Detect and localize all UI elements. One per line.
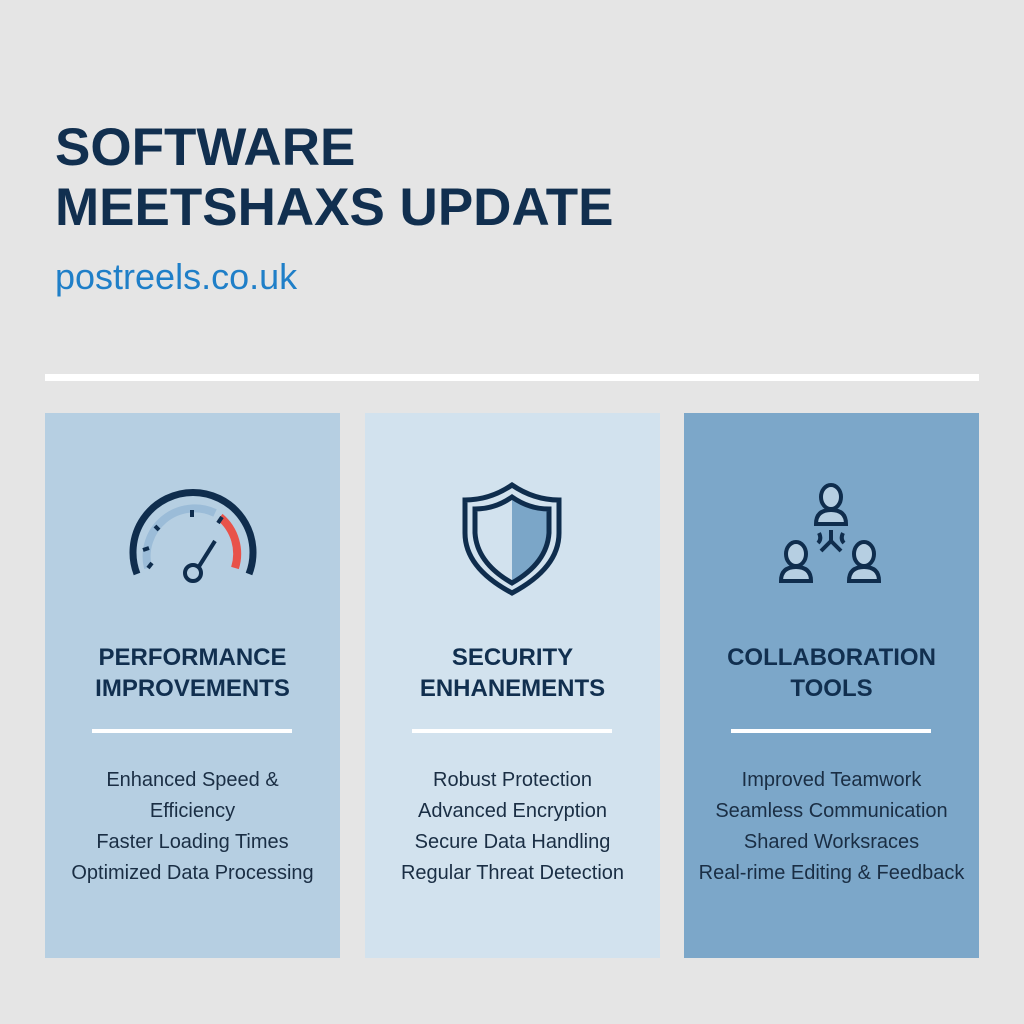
title: [55, 118, 614, 237]
list: Seamless Communication: [715, 800, 948, 822]
heading: IMPROVEMENTS: [95, 675, 290, 702]
list: Enhanced Speed &: [106, 769, 279, 791]
title: SOFTWARE: [55, 118, 355, 177]
heading: COLLABORATION: [727, 644, 936, 671]
panel: performance: [45, 413, 340, 958]
list: Robust Protection: [433, 769, 592, 791]
panel: collaboration: [684, 413, 979, 958]
heading: [95, 644, 290, 702]
list: Improved Teamwork: [742, 769, 921, 791]
list: [71, 769, 314, 884]
list: [401, 769, 624, 884]
icon: people network: [779, 483, 881, 583]
list: Efficiency: [150, 800, 235, 822]
list: Real-rime Editing & Feedback: [699, 862, 964, 884]
list: Shared Worksraces: [744, 831, 919, 853]
list: Advanced Encryption: [418, 800, 607, 822]
list: Regular Threat Detection: [401, 862, 624, 884]
subtitle url: postreels.co.uk: [55, 256, 297, 297]
heading: PERFORMANCE: [98, 644, 286, 671]
list: Faster Loading Times: [96, 831, 289, 853]
icon: shield: [462, 482, 562, 596]
list: Optimized Data Processing: [71, 862, 314, 884]
divider line: [45, 374, 979, 381]
title: MEETSHAXS UPDATE: [55, 178, 614, 237]
heading: TOOLS: [790, 675, 873, 702]
heading: SECURITY: [452, 644, 573, 671]
list: Secure Data Handling: [415, 831, 610, 853]
heading: [727, 644, 936, 702]
heading: [420, 644, 605, 702]
heading: ENHANEMENTS: [420, 675, 605, 702]
icon: speedometer: [130, 489, 256, 583]
list: [699, 769, 964, 884]
panel: security: [365, 413, 660, 958]
